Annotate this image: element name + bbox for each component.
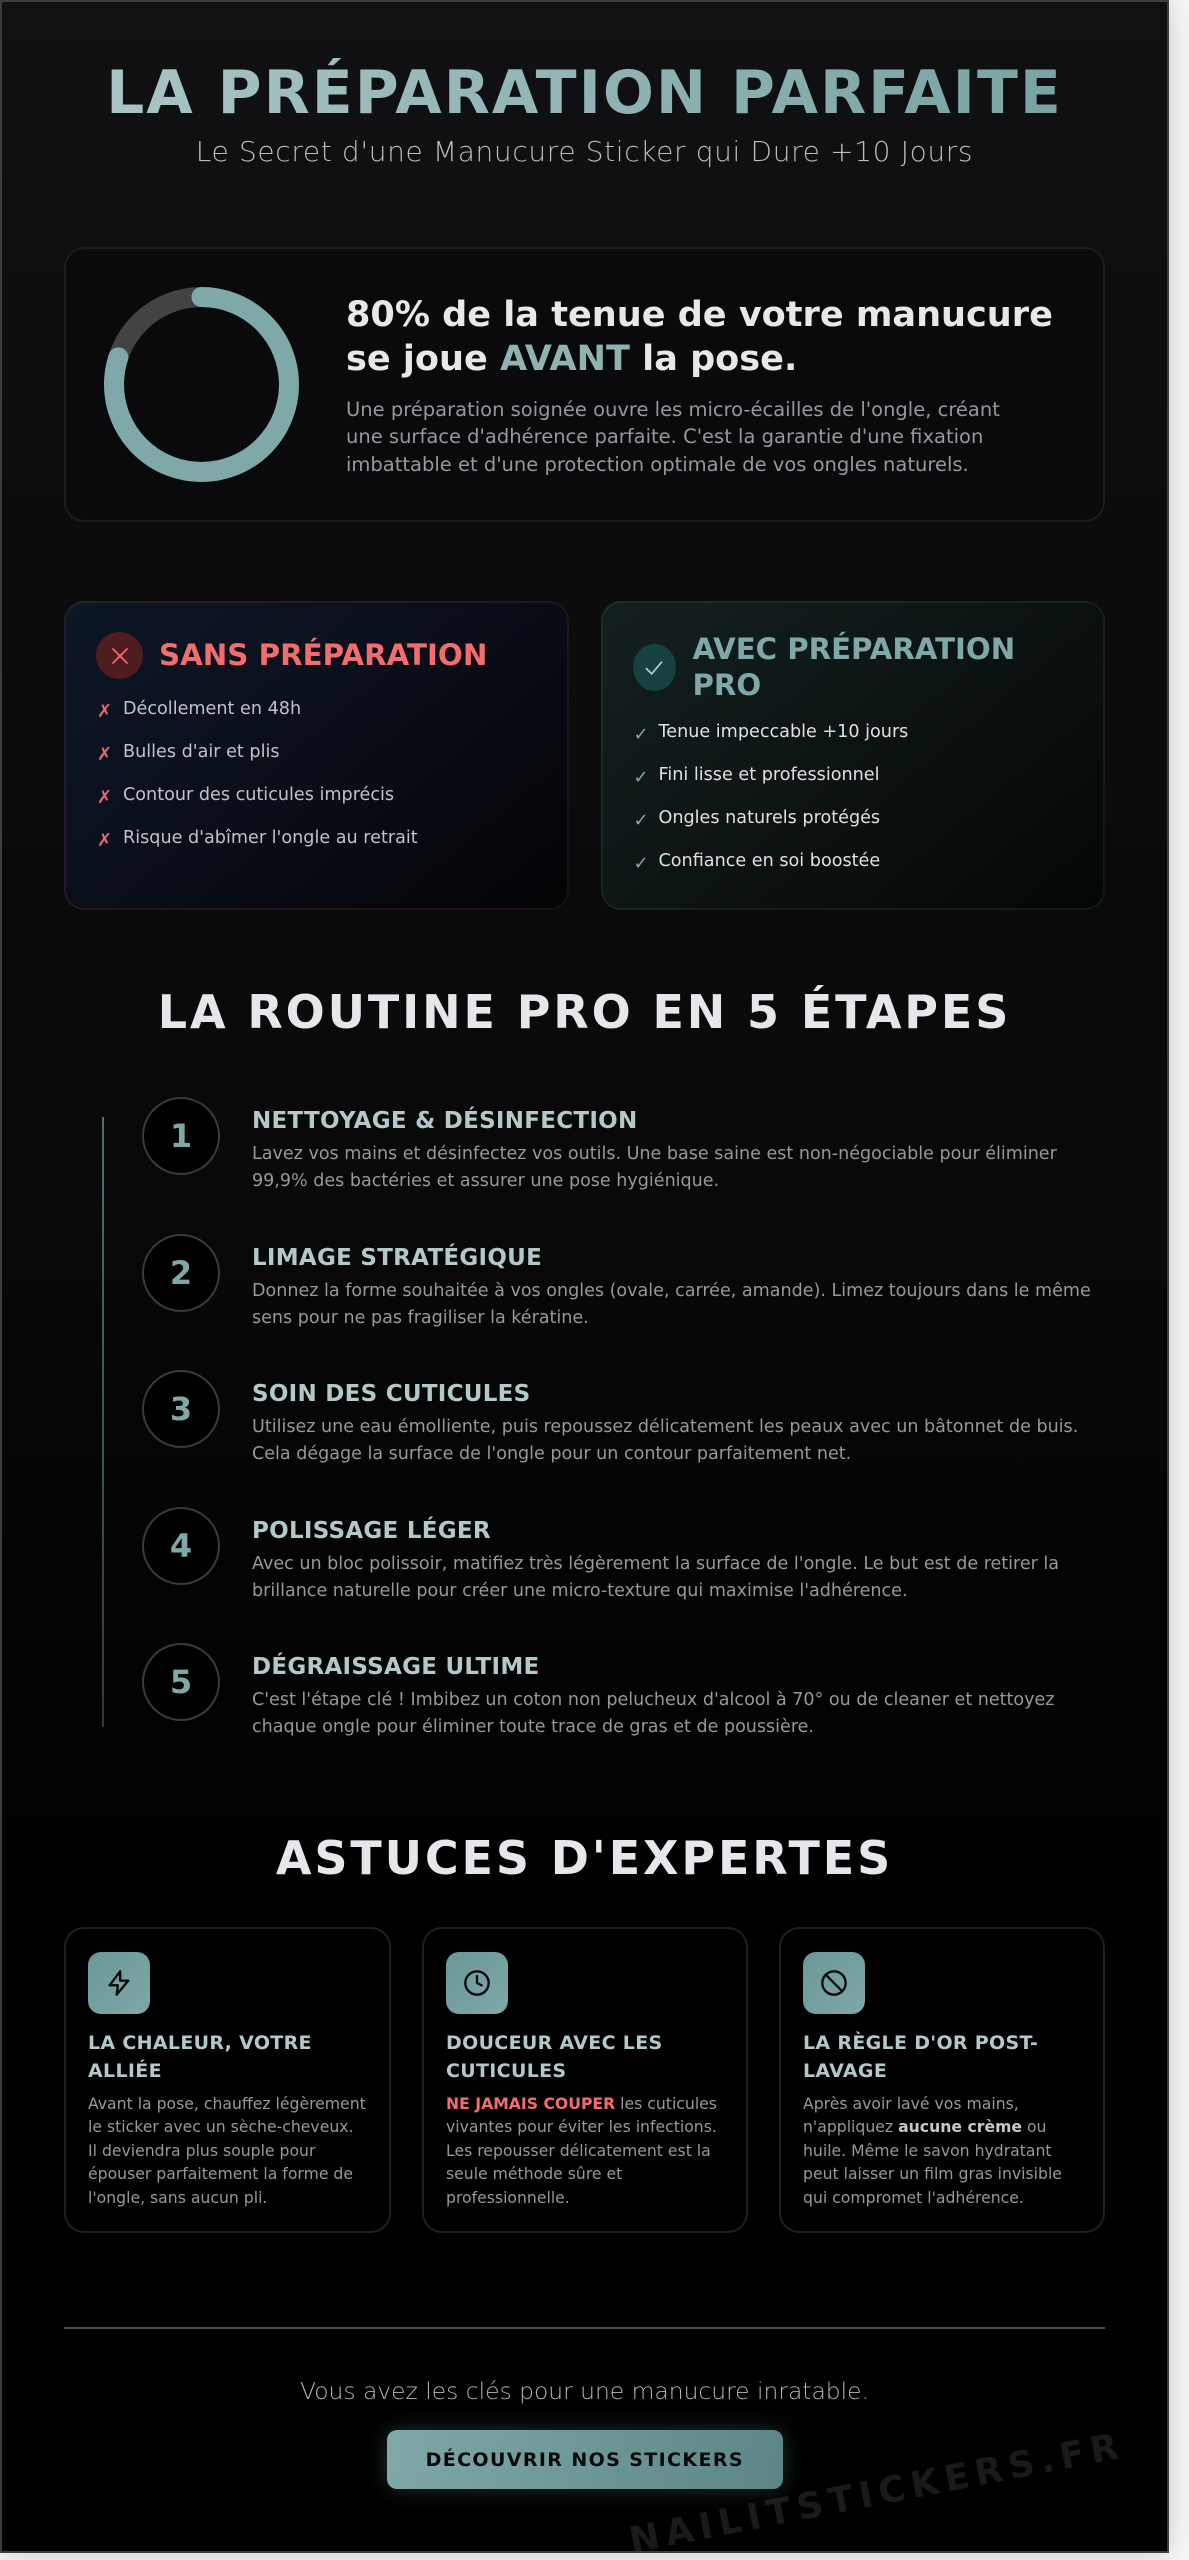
timeline line: [102, 1117, 104, 1727]
step 3 text: Cela dégage la surface de l'ongle pour un contour parfaitement net.: [252, 1444, 851, 1464]
statistic description: [346, 398, 1000, 476]
step 2 title: LIMAGE STRATÉGIQUE: [252, 1245, 542, 1271]
number 2: [142, 1234, 220, 1312]
step 3 text: [252, 1417, 1078, 1464]
number 1: [142, 1097, 220, 1175]
tip text: qui compromet l'adhérence.: [803, 2188, 1024, 2207]
step 2: [142, 1234, 1091, 1328]
step 3: [142, 1370, 1078, 1464]
tip text: vivantes pour éviter les infections.: [446, 2117, 717, 2136]
list: problems: ✗: [97, 701, 112, 722]
step 3 text: Utilisez une eau émolliente, puis repoussez délicatement les peaux avec un bâtonnet de buis.: [252, 1417, 1078, 1437]
step 2 text: [252, 1280, 1091, 1328]
heading: routine: LA ROUTINE PRO EN 5 ÉTAPES: [158, 985, 1011, 1039]
step 1: [142, 1097, 1057, 1191]
tip text: [803, 2094, 1062, 2207]
step 1 text: 99,9% des bactéries et assurer une pose hygiénique.: [252, 1171, 719, 1191]
tip text: n'appliquez aucune crème ou: [803, 2117, 1046, 2136]
list: problems: [97, 699, 418, 851]
number 4: [142, 1506, 220, 1584]
tip text: NE JAMAIS COUPER les cuticules: [446, 2094, 717, 2113]
list: benefits: ✓: [634, 810, 649, 831]
list: problems: Décollement en 48h: [123, 699, 301, 719]
step 4 text: brillance naturelle pour créer une micro-texture qui maximise l'adhérence.: [252, 1581, 908, 1601]
step 2 text: Donnez la forme souhaitée à vos ongles (ovale, carrée, amande). Limez toujours dans le même: [252, 1280, 1091, 1300]
panel: key statistic: [64, 247, 1105, 522]
panel: avec préparation: [600, 601, 1105, 910]
list: benefits: Fini lisse et professionnel: [658, 765, 880, 785]
tip text: [88, 2094, 366, 2207]
step 1 text: [252, 1144, 1057, 1191]
tip text: peut laisser un film gras invisible: [803, 2164, 1062, 2183]
tip text: huile. Même le savon hydratant: [803, 2141, 1052, 2160]
tip text: Les repousser délicatement est la: [446, 2141, 711, 2160]
icon: ban: [803, 1952, 865, 2014]
list: problems: ✗: [97, 787, 112, 808]
list: problems: ✗: [97, 744, 112, 765]
tip text: seule méthode sûre et: [446, 2164, 622, 2183]
icon: clock: [446, 1952, 508, 2014]
statistic description: Une préparation soignée ouvre les micro-écailles de l'ongle, créant: [346, 398, 1000, 421]
list: benefits: ✓: [634, 724, 649, 745]
tip card: règle d'or: [779, 1927, 1105, 2233]
statistic description: imbattable et d'une protection optimale de vos ongles naturels.: [346, 453, 969, 476]
tip title: DOUCEUR AVEC LES: [446, 2032, 662, 2054]
heading: astuces: ASTUCES D'EXPERTES: [276, 1830, 893, 1884]
subtitle: Le Secret d'une Manucure Sticker qui Dure +10 Jours: [196, 135, 973, 168]
step 5 title: DÉGRAISSAGE ULTIME: [252, 1654, 539, 1680]
number 2: 2: [170, 1254, 192, 1292]
number 5: 5: [170, 1663, 192, 1701]
list: problems: Contour des cuticules imprécis: [123, 785, 394, 805]
tip title: ALLIÉE: [88, 2060, 162, 2082]
statistic heading: [346, 294, 1053, 379]
statistic heading: se joue AVANT la pose.: [346, 338, 797, 379]
step 5 text: chaque ongle pour éliminer toute trace de gras et de poussière.: [252, 1717, 814, 1737]
step 2 text: sens pour ne pas fragiliser la kératine.: [252, 1308, 589, 1328]
tip title: [88, 2032, 312, 2082]
title: LA PRÉPARATION PARFAITE: [106, 58, 1063, 128]
tip card: chaleur: [64, 1927, 391, 2233]
button: DÉCOUVRIR NOS STICKERS: [426, 2449, 744, 2471]
tip text: professionnelle.: [446, 2188, 570, 2207]
icon: lightning: [88, 1952, 150, 2014]
tip text: le sticker avec un sèche-cheveux.: [88, 2117, 354, 2136]
tip title: LA RÈGLE D'OR POST-: [803, 2032, 1038, 2054]
step 1 title: NETTOYAGE & DÉSINFECTION: [252, 1108, 638, 1134]
tip title: LAVAGE: [803, 2060, 887, 2082]
step 5: [142, 1643, 1054, 1737]
heading: AVEC PRÉPARATION: [692, 632, 1015, 666]
tip text: épouser parfaitement la forme de: [88, 2164, 353, 2183]
list: benefits: ✓: [634, 853, 649, 874]
tip title: [803, 2032, 1038, 2082]
list: benefits: Ongles naturels protégés: [658, 808, 880, 828]
number 3: [142, 1370, 220, 1448]
number 1: 1: [170, 1117, 192, 1155]
statistic description: une surface d'adhérence parfaite. C'est la garantie d'une fixation: [346, 425, 983, 448]
button: [387, 2430, 782, 2489]
step 5 text: [252, 1690, 1054, 1737]
list: benefits: [634, 722, 908, 874]
list: problems: ✗: [97, 830, 112, 851]
step 4: [142, 1507, 1059, 1601]
tip title: [446, 2032, 662, 2082]
tip text: Après avoir lavé vos mains,: [803, 2094, 1019, 2113]
donut chart: 80%: [104, 287, 299, 482]
step 5 text: C'est l'étape clé ! Imbibez un coton non pelucheux d'alcool à 70° ou de cleaner et nettoyez: [252, 1690, 1054, 1710]
tip text: Il deviendra plus souple pour: [88, 2141, 315, 2160]
step 4 text: [252, 1554, 1059, 1601]
closing text: Vous avez les clés pour une manucure inratable.: [300, 2376, 869, 2404]
icon: check: [632, 644, 676, 691]
number 3: 3: [170, 1390, 192, 1428]
list: benefits: Tenue impeccable +10 jours: [658, 722, 908, 742]
heading: SANS PRÉPARATION: [159, 638, 487, 672]
tip text: [446, 2094, 717, 2207]
tip title: LA CHALEUR, VOTRE: [88, 2032, 312, 2054]
heading: [692, 632, 1015, 702]
step 3 title: SOIN DES CUTICULES: [252, 1381, 530, 1407]
heading: PRO: [692, 668, 761, 702]
list: benefits: Confiance en soi boostée: [658, 851, 880, 871]
icon: cross: [96, 632, 143, 679]
panel: sans préparation: [64, 601, 569, 910]
number 5: [142, 1643, 220, 1721]
statistic heading: 80% de la tenue de votre manucure: [346, 294, 1053, 335]
step 4 title: POLISSAGE LÉGER: [252, 1518, 491, 1544]
step 1 text: Lavez vos mains et désinfectez vos outils. Une base saine est non-négociable pour éliminer: [252, 1144, 1057, 1164]
tip text: l'ongle, sans aucun pli.: [88, 2188, 267, 2207]
tip text: Avant la pose, chauffez légèrement: [88, 2094, 366, 2113]
number 4: 4: [170, 1526, 192, 1564]
list: problems: Bulles d'air et plis: [123, 742, 280, 762]
list: problems: Risque d'abîmer l'ongle au retrait: [123, 828, 418, 848]
step 4 text: Avec un bloc polissoir, matifiez très légèrement la surface de l'ongle. Le but est de retirer la: [252, 1554, 1059, 1574]
list: benefits: ✓: [634, 767, 649, 788]
tip title: CUTICULES: [446, 2060, 566, 2082]
tip card: cuticules: [422, 1927, 748, 2233]
